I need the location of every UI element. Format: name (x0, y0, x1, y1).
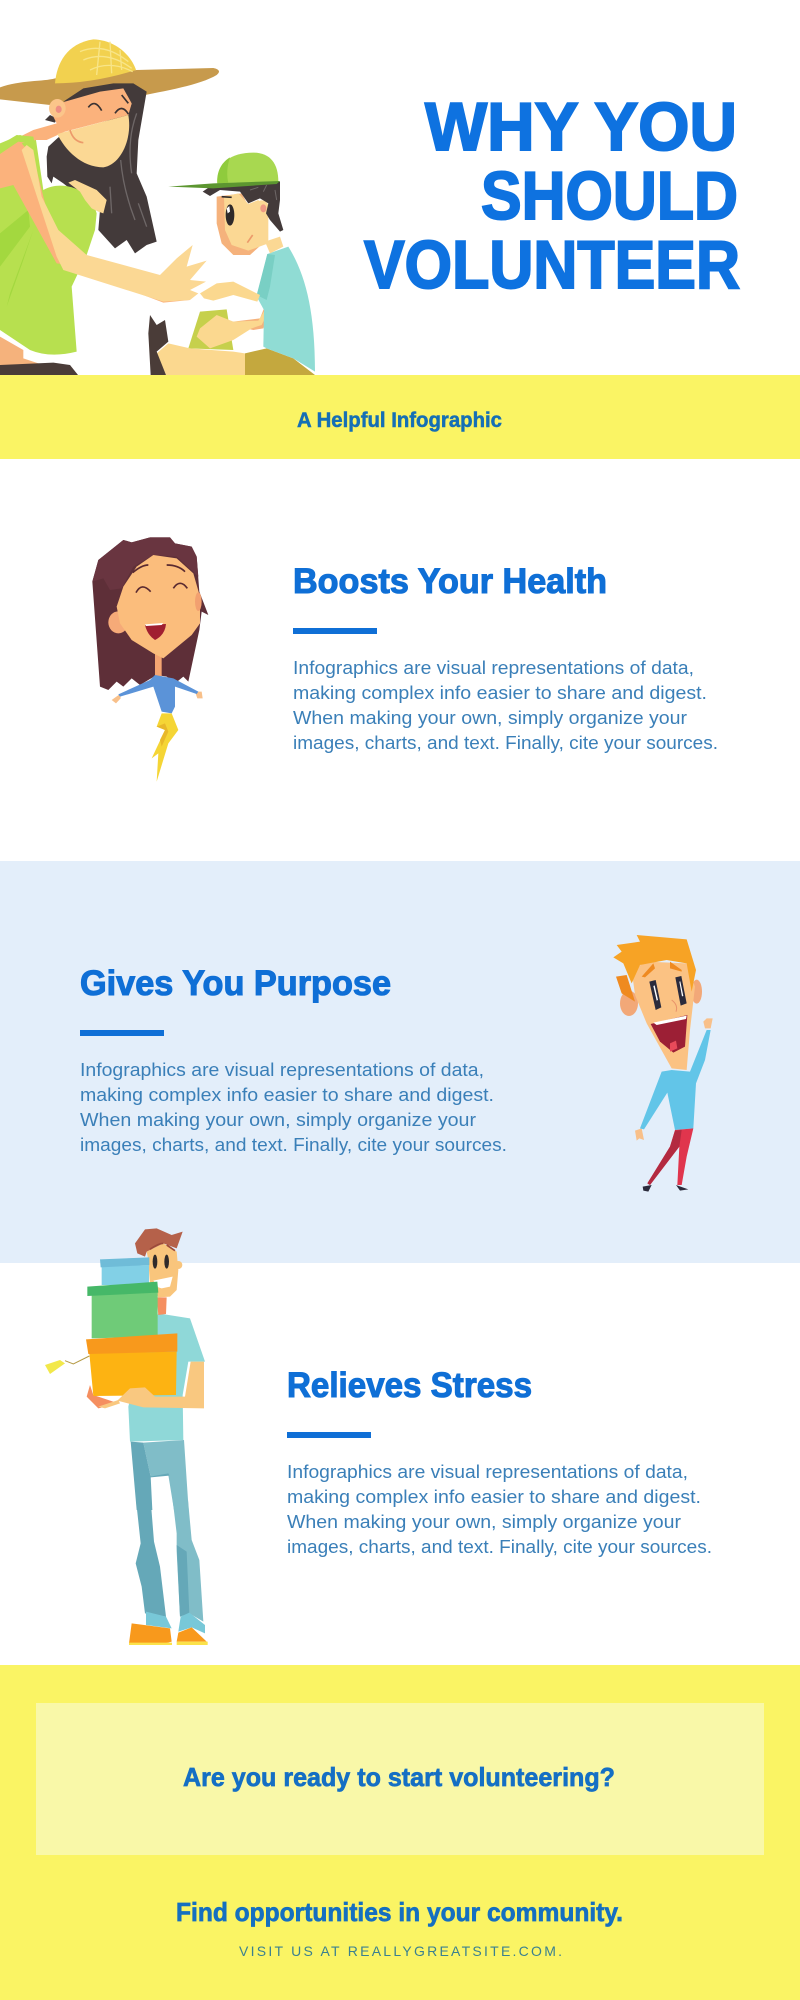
subtitle band (0, 375, 800, 459)
icon: smiling girl with lightning legs (92, 537, 208, 782)
body text: Infographics are visual representations of data, (80, 1060, 484, 1080)
divider bar (293, 628, 377, 634)
body text: When making your own, simply organize your (80, 1110, 476, 1130)
panel: relieves stress (0, 1228, 800, 1665)
body text: Infographics are visual representations of data, (293, 658, 694, 678)
footer line: Find opportunities in your community. (176, 1897, 623, 1927)
body text: images, charts, and text. Finally, cite your sources. (287, 1537, 712, 1557)
panel: footer call to action (0, 1665, 800, 2000)
title (364, 89, 740, 303)
title: VOLUNTEER (364, 227, 740, 303)
body text: images, charts, and text. Finally, cite your sources. (293, 733, 718, 753)
body text: When making your own, simply organize your (293, 708, 687, 728)
heading: Relieves Stress (287, 1366, 532, 1405)
divider bar (80, 1030, 164, 1036)
panel: boosts your health (0, 459, 800, 861)
website line: VISIT US AT REALLYGREATSITE.COM. (239, 1943, 562, 1959)
body text: When making your own, simply organize your (287, 1512, 681, 1532)
icon: man carrying stacked boxes (45, 1228, 208, 1645)
panel: header (0, 0, 800, 375)
title: SHOULD (481, 158, 738, 234)
panel: gives you purpose (0, 861, 800, 1263)
heading: Gives You Purpose (80, 964, 391, 1003)
subtitle band: A Helpful Infographic (297, 409, 502, 432)
body text (293, 658, 718, 753)
divider bar (287, 1432, 371, 1438)
body text (287, 1462, 712, 1557)
body text: making complex info easier to share and digest. (293, 683, 707, 703)
dress strap (0, 135, 43, 188)
title: WHY YOU (425, 89, 737, 165)
body text (80, 1060, 507, 1155)
icon: cheering man waving (613, 935, 713, 1192)
body text: Infographics are visual representations of data, (287, 1462, 688, 1482)
illustration: woman and boy building sandcastle (0, 39, 315, 375)
callout question: Are you ready to start volunteering? (183, 1762, 615, 1792)
body text: images, charts, and text. Finally, cite your sources. (80, 1135, 507, 1155)
heading: Boosts Your Health (293, 562, 607, 601)
body text: making complex info easier to share and digest. (287, 1487, 701, 1507)
callout box (36, 1703, 764, 1855)
body text: making complex info easier to share and digest. (80, 1085, 494, 1105)
